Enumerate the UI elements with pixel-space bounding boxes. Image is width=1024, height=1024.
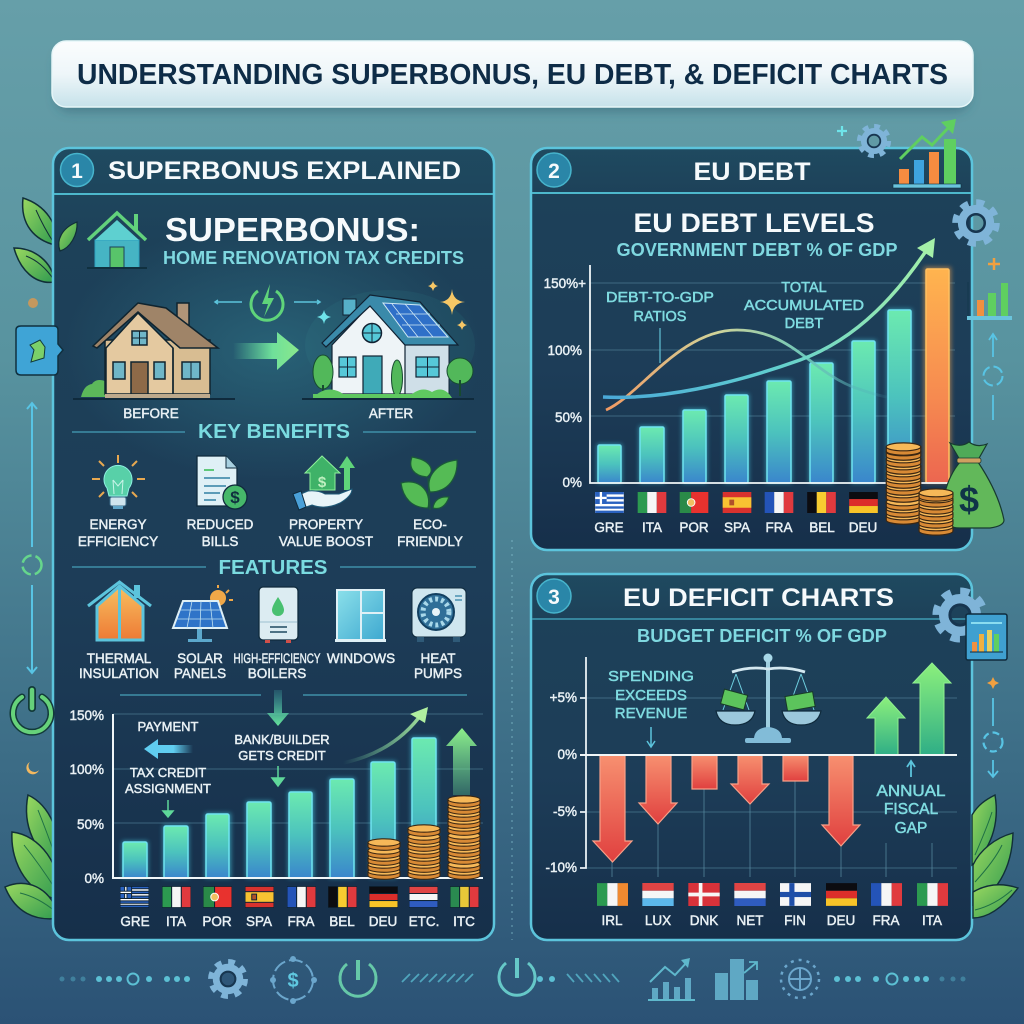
icon: green power <box>13 690 51 732</box>
icon: property value house and hand: $ <box>318 474 327 491</box>
number badge 2 <box>537 153 571 187</box>
vertical rule <box>992 698 994 726</box>
country labels <box>120 914 475 929</box>
country labels: LUX <box>645 913 671 928</box>
vertical rule <box>992 395 994 420</box>
icon: mini bar chart <box>967 282 1012 320</box>
decorative dots left <box>60 974 190 984</box>
icon: orange dot <box>28 298 38 308</box>
arrow: down <box>988 760 998 777</box>
label: spending exceeds revenue <box>608 668 694 722</box>
curve: debt-to-gdp ratio <box>606 330 887 410</box>
coin stack medium <box>408 825 440 879</box>
decorative dots right <box>834 974 966 984</box>
label: total accumulated debt: ACCUMULATED <box>744 298 864 314</box>
label: debt-to-gdp ratios: DEBT-TO-GDP <box>606 290 714 306</box>
label: debt-to-gdp ratios: RATIOS <box>634 309 686 325</box>
country flags <box>595 492 878 513</box>
label: energy efficiency <box>78 517 158 549</box>
label: spending exceeds revenue: REVENUE <box>615 705 687 722</box>
label: high-efficiency boilers: BOILERS <box>248 666 306 681</box>
icon: thermal insulation <box>88 582 151 640</box>
icon: reduced bills document: $ <box>230 488 240 507</box>
icon: top right growth chart <box>893 119 961 188</box>
arrow: big down to chart <box>267 690 289 726</box>
chart bars with glow <box>597 267 951 483</box>
country labels: ITA <box>166 914 186 929</box>
panel heading: EU DEFICIT CHARTS <box>623 584 894 612</box>
number badge 3 <box>537 579 571 613</box>
label: high-efficiency boilers: HIGH-EFFICIENCY <box>234 651 320 666</box>
icon: dollar ring: $ <box>287 970 299 992</box>
country flags <box>597 883 948 906</box>
label: thermal insulation <box>79 651 159 681</box>
arrow: green up <box>446 728 477 795</box>
icon: high-efficiency boiler <box>259 587 298 643</box>
label: tax credit assignment: TAX CREDIT <box>130 765 206 780</box>
country labels: SPA <box>246 914 272 929</box>
country labels: GRE <box>120 914 150 929</box>
axes <box>580 657 586 868</box>
y axis labels: 0% <box>562 475 582 490</box>
axes <box>590 265 957 483</box>
deficit chart <box>545 654 957 928</box>
icon: orange spark <box>987 677 999 689</box>
bottom icon strip <box>60 956 966 1004</box>
label: eco-friendly <box>397 517 463 549</box>
y axis labels: 100% <box>547 343 582 358</box>
country labels <box>594 520 877 535</box>
green surplus arrows <box>867 663 951 755</box>
label: property value boost <box>279 517 373 549</box>
decorative dots centre <box>537 976 555 982</box>
title banner <box>52 41 973 112</box>
y axis labels <box>545 690 577 875</box>
panel heading: EU DEBT <box>694 158 810 186</box>
icon: balance scale <box>716 654 821 743</box>
panel 3: EU deficit charts <box>531 574 972 940</box>
coin stack large <box>448 796 480 879</box>
y axis labels: 0% <box>84 871 104 886</box>
icon: growth chart <box>648 958 695 1000</box>
country labels: DEU <box>369 914 397 929</box>
debt bar chart <box>544 238 957 535</box>
label: total accumulated debt <box>744 280 864 332</box>
icon: heat pump <box>412 588 466 642</box>
label: spending exceeds revenue: SPENDING <box>608 668 694 685</box>
decorative slashes right <box>567 974 619 982</box>
y axis labels: 50% <box>555 410 582 425</box>
icon: cycle ring <box>984 366 1002 386</box>
label: tax credit assignment <box>125 765 211 796</box>
right side decorations, lower <box>972 677 1018 918</box>
pointer line <box>659 328 661 363</box>
country labels: IRL <box>601 913 623 928</box>
icon: dollar ring <box>270 956 317 1004</box>
icon: blue chat box <box>16 326 63 375</box>
y axis labels: +5% <box>550 690 577 705</box>
y axis labels: -5% <box>553 804 577 819</box>
number badge 2: 2 <box>548 160 560 183</box>
number badge 1: 1 <box>71 160 83 183</box>
y axis labels: 0% <box>557 747 577 762</box>
country labels: ITA <box>922 913 942 928</box>
centre dotted divider <box>511 540 513 940</box>
label: annual fiscal gap: ANNUAL <box>876 783 946 800</box>
icon: upper left leaves <box>14 198 56 290</box>
label: heat pumps <box>414 651 462 681</box>
icon: reduced bills document <box>197 456 247 509</box>
arrow: left up <box>27 403 37 547</box>
country labels: ITC <box>453 914 475 929</box>
label: spending exceeds revenue: EXCEEDS <box>615 687 687 704</box>
icon: lower right leaves <box>972 795 1018 918</box>
y axis labels <box>69 708 104 886</box>
country labels: DEU <box>827 913 855 928</box>
arrow: spending down <box>647 727 655 747</box>
coin stack short <box>919 489 953 535</box>
chart bars with glow <box>122 737 437 878</box>
country labels: DNK <box>690 913 718 928</box>
label: reduced bills <box>187 517 254 549</box>
icon: energy efficiency bulb <box>92 455 145 509</box>
heading: superbonus: SUPERBONUS: <box>165 211 420 248</box>
illustration: before house <box>73 303 235 399</box>
red deficit arrows <box>593 755 860 862</box>
label: reduced bills: REDUCED <box>187 517 254 532</box>
subheading: government debt: GOVERNMENT DEBT % OF GDP <box>616 240 898 260</box>
arrow: left down <box>27 585 37 673</box>
icon: lower left leaves <box>5 795 60 919</box>
label: solar panels: SOLAR <box>177 651 223 666</box>
y axis labels: -10% <box>545 860 577 875</box>
panel heading: SUPERBONUS EXPLAINED <box>108 157 461 185</box>
icon: eco-friendly leaves <box>401 457 457 510</box>
icon: recycle ring <box>22 556 42 574</box>
label: heat pumps: HEAT <box>420 651 456 666</box>
coin stack small <box>368 839 400 879</box>
label: bank/builder gets credit: BANK/BUILDER <box>234 732 330 747</box>
country labels: ETC. <box>409 914 439 929</box>
icon: solar panels <box>173 585 233 642</box>
number badge 3: 3 <box>548 586 560 609</box>
country labels <box>601 913 942 928</box>
icon: moon <box>26 762 39 774</box>
label: bank/builder gets credit: GETS CREDIT <box>238 748 326 763</box>
icon: gear beside EU debt levels <box>956 203 996 243</box>
label: energy efficiency: ENERGY <box>89 517 147 532</box>
country labels: NET <box>736 913 764 928</box>
label: annual fiscal gap <box>876 783 946 837</box>
icon: leaf over panel <box>59 222 77 251</box>
label: tax credit assignment: ASSIGNMENT <box>125 781 211 796</box>
icon: gear and dashboard <box>937 592 1007 660</box>
label: windows: WINDOWS <box>327 651 395 666</box>
icon: orange plus <box>988 258 1000 270</box>
country labels: POR <box>202 914 232 929</box>
icon: money bag: $ <box>959 479 979 520</box>
right side decorations, upper <box>967 258 1012 420</box>
label: reduced bills: BILLS <box>202 534 238 549</box>
y axis labels: 100% <box>69 762 104 777</box>
heading: key benefits: KEY BENEFITS <box>198 421 350 443</box>
icon: gear <box>211 962 245 996</box>
country labels: FIN <box>784 913 806 928</box>
label: property value boost: PROPERTY <box>289 517 363 532</box>
arrow: curved growth <box>343 707 428 763</box>
icon: windows <box>335 590 386 642</box>
axes <box>113 714 483 878</box>
label: high-efficiency boilers <box>234 651 320 681</box>
country labels: SPA <box>724 520 750 535</box>
number badge 1 <box>60 154 94 186</box>
arrow: small down to bars <box>163 800 173 817</box>
icon: buildings <box>715 959 758 1000</box>
y axis labels: 50% <box>77 817 104 832</box>
icon: green house <box>87 213 147 268</box>
illustration: after house <box>302 281 475 400</box>
icon: money bag <box>943 442 1004 528</box>
icon: target <box>781 960 819 998</box>
label: payment: PAYMENT <box>138 719 199 734</box>
label: after: AFTER <box>369 406 413 421</box>
label: thermal insulation: INSULATION <box>79 666 159 681</box>
title text: UNDERSTANDING SUPERBONUS, EU DEBT, & DEFICIT CHARTS <box>77 59 948 91</box>
y axis labels <box>544 276 586 490</box>
label: solar panels: PANELS <box>174 666 226 681</box>
icon: power <box>340 960 376 996</box>
label: total accumulated debt: DEBT <box>785 316 823 332</box>
icon: top gear <box>860 127 888 155</box>
decorative slashes left <box>402 974 473 982</box>
label: before: BEFORE <box>123 406 179 421</box>
coin stack tall <box>886 443 921 524</box>
subheading: home renovation tax credits: HOME RENOVATION TAX CREDITS <box>163 248 464 268</box>
arrow: payment left <box>144 739 193 759</box>
label: eco-friendly: ECO- <box>413 517 447 532</box>
country labels: POR <box>679 520 709 535</box>
country labels: FRA <box>766 520 792 535</box>
icon: plus <box>837 126 847 136</box>
y axis labels: 150%+ <box>544 276 586 291</box>
country labels: GRE <box>594 520 624 535</box>
label: thermal insulation: THERMAL <box>87 651 152 666</box>
label: bank/builder gets credit <box>234 732 330 763</box>
icon: dashed ring <box>984 732 1002 752</box>
country labels: DEU <box>849 520 877 535</box>
label: total accumulated debt: TOTAL <box>781 280 827 296</box>
label: energy efficiency: EFFICIENCY <box>78 534 158 549</box>
label: heat pumps: PUMPS <box>414 666 462 681</box>
heading: features: FEATURES <box>218 557 328 579</box>
heading: EU debt levels: EU DEBT LEVELS <box>634 208 874 238</box>
label: eco-friendly: FRIENDLY <box>397 534 463 549</box>
country labels: BEL <box>329 914 355 929</box>
label: property value boost: VALUE BOOST <box>279 534 373 549</box>
left side decorations behind panel <box>5 198 60 919</box>
panel 2: EU debt <box>531 148 972 550</box>
y axis labels: 150% <box>69 708 104 723</box>
label: annual fiscal gap: FISCAL <box>884 801 939 818</box>
left side overlaps on panel edge <box>13 222 77 732</box>
subheading: budget deficit: BUDGET DEFICIT % OF GDP <box>637 626 887 646</box>
icon: property value house and hand <box>293 456 355 510</box>
arrow: accumulated debt curve <box>603 238 935 397</box>
label: annual fiscal gap: GAP <box>895 820 927 837</box>
icon: power centre <box>499 958 535 995</box>
country flags <box>120 886 479 908</box>
arrow: small down from bank <box>272 766 284 786</box>
country labels: BEL <box>809 520 835 535</box>
arrow: up <box>989 334 997 357</box>
tax credit bar chart <box>69 690 483 929</box>
arrow: before to after <box>233 332 299 370</box>
label: debt-to-gdp ratios <box>606 290 714 325</box>
panel 1: superbonus explained <box>53 148 494 940</box>
country labels: FRA <box>288 914 314 929</box>
country labels: ITA <box>642 520 662 535</box>
country labels: FRA <box>872 913 900 928</box>
arrow: power transition <box>215 284 320 320</box>
arrow: fiscal gap up <box>907 761 915 777</box>
label: solar panels <box>174 651 226 681</box>
